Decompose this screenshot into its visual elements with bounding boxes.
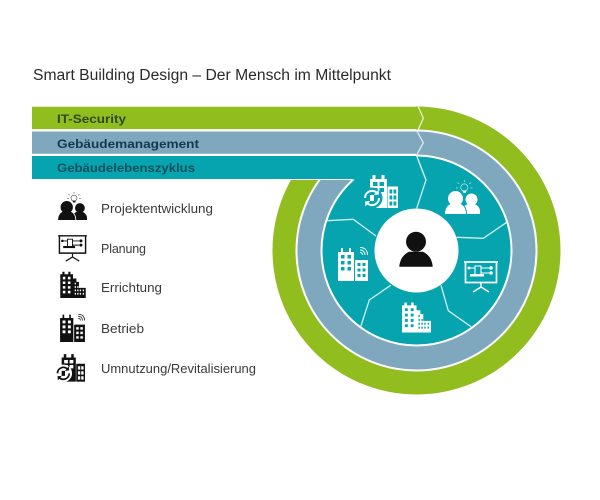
- centre circle: [374, 208, 458, 292]
- icon: building under construction: [402, 302, 431, 332]
- bar: Gebäudelebenszyklus: [32, 156, 417, 200]
- legend: Errichtung: [60, 272, 162, 298]
- ring: Gebäudemanagement: [296, 130, 536, 370]
- legend: Umnutzung/Revitalisierung: Umnutzung/Revitalisierung: [101, 362, 256, 376]
- icon: connected building: [338, 248, 368, 281]
- title: Smart Building Design – Der Mensch im Mittelpunkt: [33, 67, 392, 84]
- teal sector divider over bar: [417, 156, 426, 180]
- legend: Betrieb: Betrieb: [101, 322, 144, 336]
- bar: Gebäudemanagement: Gebäudemanagement: [57, 137, 199, 151]
- ring icons: [338, 175, 498, 332]
- bar: IT-Security: [32, 107, 423, 129]
- circular diagram: [272, 106, 560, 394]
- icon: presentation board: [464, 262, 498, 292]
- ring: IT-Security: [272, 106, 560, 394]
- ring: Gebäudelebenszyklus: [322, 156, 512, 346]
- bar: Gebäudelebenszyklus: Gebäudelebenszyklus: [57, 161, 195, 175]
- legend: Planung: [58, 236, 146, 261]
- legend: Betrieb: [60, 314, 144, 342]
- legend: Umnutzung/Revitalisierung: [55, 354, 256, 382]
- icon: person: [399, 232, 433, 267]
- legend: Errichtung: Errichtung: [101, 281, 162, 295]
- bar: Gebäudemanagement: [32, 132, 418, 154]
- legend: Projektentwicklung: [58, 192, 213, 220]
- legend: [55, 192, 256, 382]
- legend: Planung: Planung: [101, 242, 146, 256]
- icon: building with recycling: [362, 175, 398, 208]
- icon: people with idea: [445, 180, 480, 214]
- legend: Projektentwicklung: Projektentwicklung: [101, 202, 213, 216]
- bar junction lines: [417, 107, 423, 155]
- bar: IT-Security: IT-Security: [57, 112, 126, 126]
- bars: [32, 105, 426, 200]
- segment dividers: [327, 156, 507, 327]
